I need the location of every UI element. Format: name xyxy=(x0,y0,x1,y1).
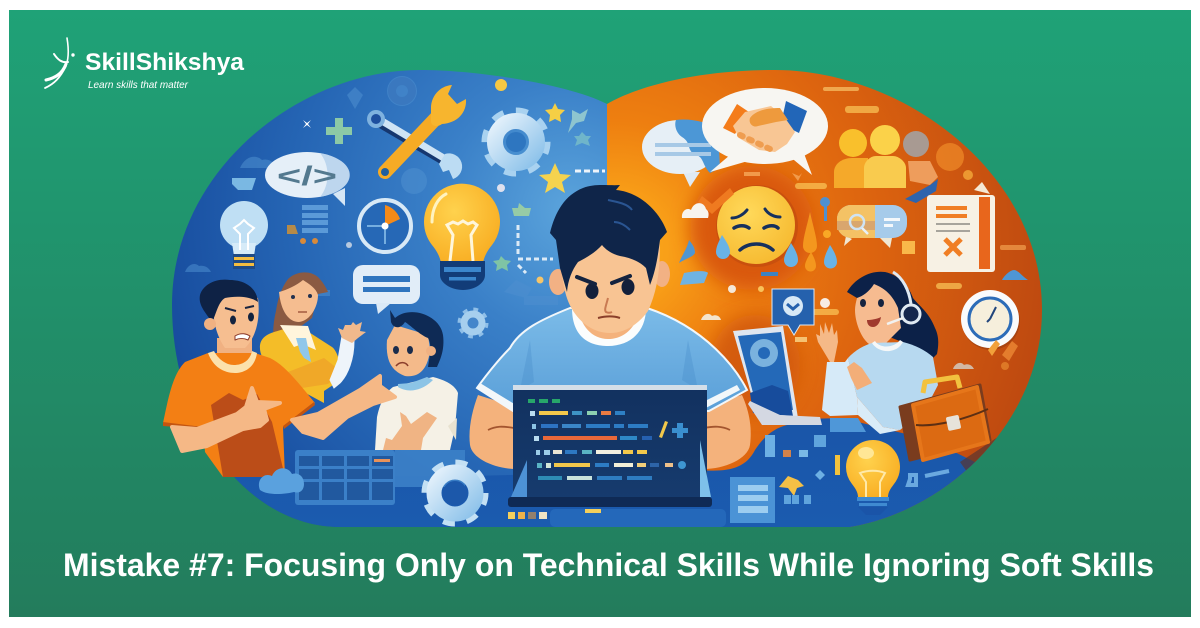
eyes and brows xyxy=(586,283,598,299)
icon: large gear xyxy=(486,112,546,172)
icon: sad emoji xyxy=(716,185,837,272)
person: man in orange shirt xyxy=(163,280,395,477)
icon: code speech bubble xyxy=(265,152,350,206)
arm pointing xyxy=(292,376,395,438)
panel: darker orange behind emoji xyxy=(690,166,814,290)
logo xyxy=(45,38,245,91)
icon: rejected document xyxy=(927,182,995,272)
right arm xyxy=(696,395,751,469)
hair xyxy=(550,185,667,292)
central figure: man at laptop xyxy=(469,185,751,507)
icon: handshake speech bubbles xyxy=(642,88,828,187)
icon: small light bulb xyxy=(220,178,268,269)
person: headset woman xyxy=(816,272,938,434)
icon: tablet on laptop xyxy=(733,298,830,425)
headset xyxy=(893,272,911,304)
laptop base xyxy=(508,497,712,507)
small cloud icons xyxy=(682,203,1028,369)
raised sleeve and hand xyxy=(330,336,354,388)
lower right blue details xyxy=(508,418,949,527)
ears xyxy=(549,269,567,295)
icon: chat heart tile xyxy=(772,289,814,335)
icon: large yellow light bulb xyxy=(424,184,500,290)
icon: small blue gear xyxy=(460,310,486,336)
forearm and hand xyxy=(172,388,280,451)
laptop screen xyxy=(513,387,707,499)
gold wrench xyxy=(385,114,440,172)
teardrops xyxy=(716,235,837,268)
t-shirt xyxy=(477,308,747,411)
icon: plus sign xyxy=(326,118,352,144)
neck and collar xyxy=(572,302,646,346)
icon: wrench and spanner xyxy=(367,85,466,179)
icon: search speech bubble xyxy=(837,205,907,248)
illustration panel: blue and orange blob xyxy=(160,60,1052,540)
raised hand xyxy=(816,322,838,362)
code symbol: </> xyxy=(277,161,337,191)
laptop stand highlight xyxy=(700,440,711,497)
title heading: Mistake #7: Focusing Only on Technical Skills While Ignoring Soft Skills xyxy=(63,547,1154,583)
handshake xyxy=(723,104,749,134)
person: woman in yellow blazer xyxy=(260,272,366,403)
spanner xyxy=(378,126,441,164)
icon: team of people xyxy=(834,125,938,203)
decorative text lines and dots xyxy=(287,205,352,248)
icon: blue document tile xyxy=(730,477,775,523)
icon: light bulb bottom right xyxy=(846,440,900,506)
icon: briefcase xyxy=(900,377,990,460)
panel: technical skills blue side xyxy=(160,60,607,540)
faint background shapes orange side xyxy=(795,87,1026,370)
icon: clock dial xyxy=(359,200,411,252)
icon: leaping figure xyxy=(45,38,74,88)
logo tagline: Learn skills that matter xyxy=(88,79,188,91)
blue chat bubble xyxy=(683,172,700,187)
table panel xyxy=(295,450,465,505)
icon: white gear bottom xyxy=(426,464,484,522)
face xyxy=(560,215,660,333)
panel: lower blue band xyxy=(234,418,975,527)
faint background shapes blue side xyxy=(185,76,478,346)
panel: dark corner under briefcase xyxy=(960,438,996,470)
sweater xyxy=(848,342,938,430)
logo wordmark: SkillShikshya xyxy=(85,49,245,76)
icon: checkmark tile and small shapes xyxy=(679,172,915,293)
person: boy in white shirt xyxy=(375,310,458,450)
icon: dim gear top xyxy=(392,81,412,101)
icon: wall clock xyxy=(961,290,1020,350)
icon: chat bubble with lines xyxy=(353,265,420,314)
white bubble xyxy=(710,156,812,175)
icon: cloud xyxy=(259,468,304,494)
decorative stars and connectors xyxy=(303,79,605,284)
left arm xyxy=(469,395,522,469)
panel: soft skills orange side xyxy=(607,60,1052,540)
panel: lower orange shadow behind tablet xyxy=(710,315,800,415)
code lines on screen xyxy=(528,399,688,480)
